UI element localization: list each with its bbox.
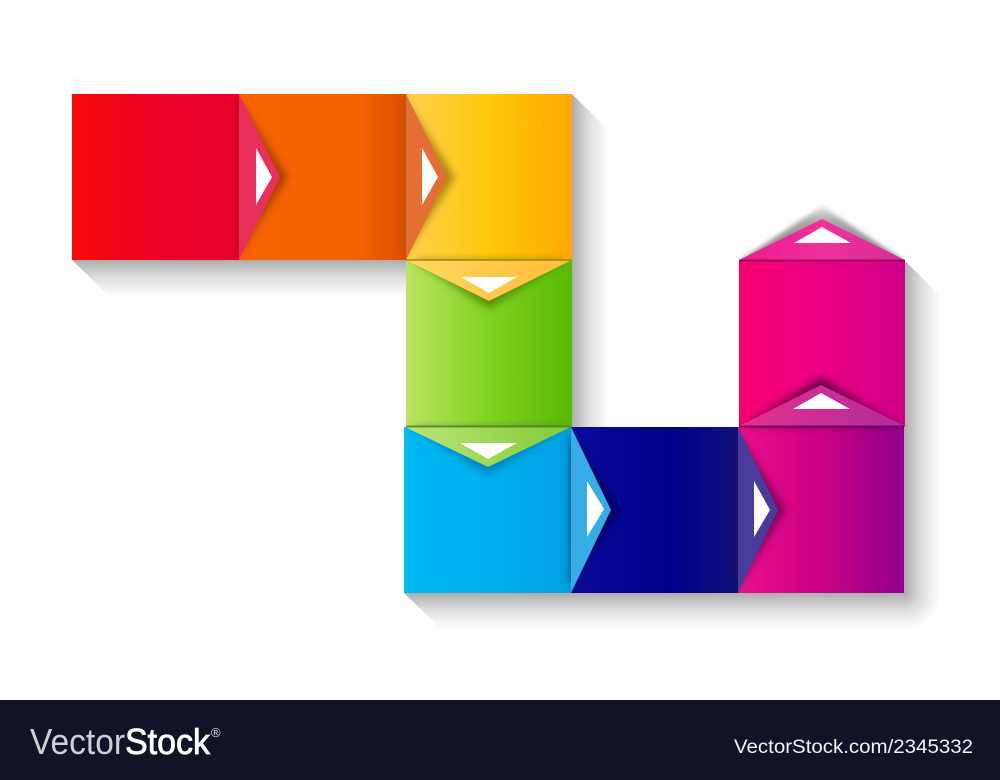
- footer bar: [0, 700, 1000, 780]
- arrow: navy to purple: [738, 427, 786, 593]
- long shadows: [72, 94, 941, 630]
- arrow: pink upward: [739, 219, 905, 262]
- panel: red square: [72, 94, 239, 260]
- arrow: orange to yellow: [406, 94, 455, 260]
- panel: blue square: [404, 427, 571, 593]
- panel: navy square: [571, 427, 738, 593]
- arrow: red to orange: [239, 94, 288, 260]
- arrow: blue to navy: [571, 427, 619, 593]
- footer url: VectorStock.com/2345332: [734, 737, 973, 758]
- arrow: green to blue: [405, 426, 571, 475]
- logo: VectorStock: Stock: [125, 721, 211, 762]
- panel: yellow square: [406, 94, 572, 260]
- logo: VectorStock: ®: [211, 725, 221, 740]
- panel: purple square: [738, 427, 904, 593]
- panel: green square: [406, 260, 572, 427]
- panel: orange square: [239, 94, 406, 260]
- logo: VectorStock: [30, 721, 221, 762]
- logo: VectorStock: Vector: [30, 721, 125, 762]
- panel: pink square: [739, 260, 905, 427]
- arrow: purple to pink: [739, 377, 905, 428]
- arrow: yellow to green: [406, 259, 572, 309]
